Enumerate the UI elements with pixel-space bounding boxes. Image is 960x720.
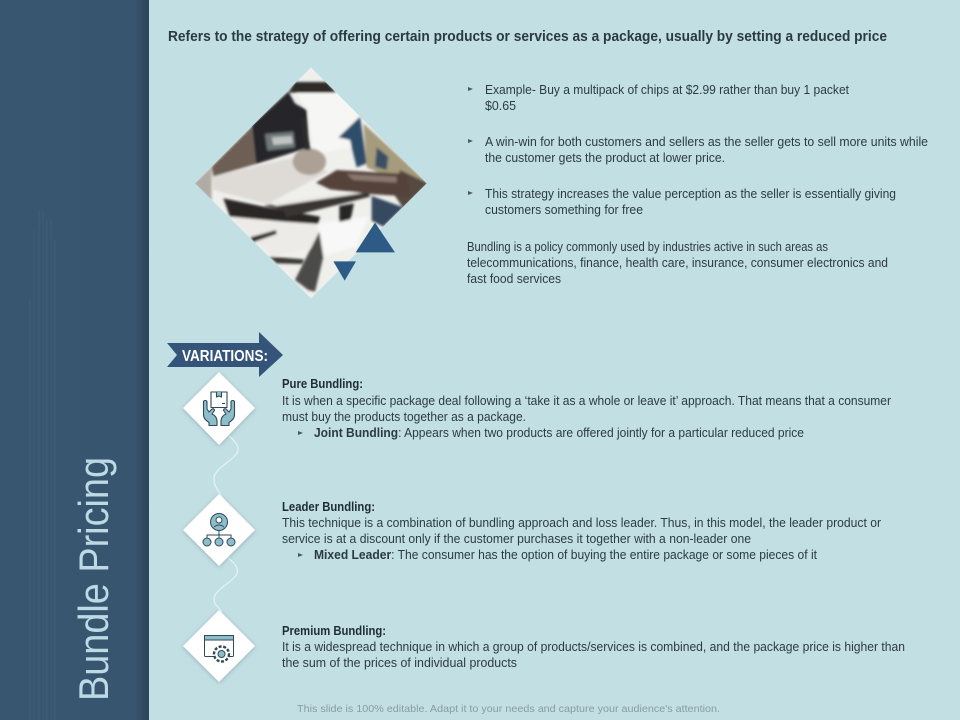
connector: wavy line 1 — [214, 436, 238, 504]
arrow banner: variations — [167, 332, 283, 377]
heading: Refers to the strategy of offering certain products or services as a package, usually by setting a reduced price — [168, 28, 887, 45]
text block: premium bundling: the sum of the prices of individual products — [282, 655, 517, 670]
icon: small triangle — [333, 261, 356, 281]
sidebar title: Bundle Pricing — [70, 457, 117, 701]
panel: sidebar — [0, 0, 149, 720]
text block: premium bundling: It is a widespread technique in which a group of products/services is combined, and the package price is higher than — [282, 639, 905, 654]
text block: leader bundling: service is at a discount only if the customer purchases it together with a non-leader one — [282, 531, 751, 546]
paragraph: industries: fast food services — [467, 271, 561, 286]
text block: pure bundling: must buy the products together as a package. — [282, 409, 526, 424]
paragraph: industries: Bundling is a policy commonly used by industries active in such areas as — [467, 239, 828, 254]
bullet 3: This strategy increases the value perception as the seller is essentially giving — [485, 186, 896, 201]
paragraph: industries — [467, 239, 888, 286]
icon: large triangle — [356, 223, 395, 252]
text block: premium bundling — [282, 624, 905, 670]
icon: leader hierarchy — [183, 494, 255, 566]
text block: leader bundling — [282, 500, 882, 562]
text block: leader bundling: Mixed Leader: The consumer has the option of buying the entire package or some pieces of it — [314, 547, 817, 562]
text block: pure bundling — [282, 377, 892, 440]
bullet 2 — [485, 134, 928, 165]
bullet 1: Example- Buy a multipack of chips at $2.99 rather than buy 1 packet — [485, 82, 849, 97]
text block: pure bundling: Joint Bundling: Appears when two products are offered jointly for a particular reduced price — [314, 425, 804, 440]
footer note: This slide is 100% editable. Adapt it to your needs and capture your audience's attention. — [297, 703, 720, 715]
arrow banner: variations: VARIATIONS: — [182, 348, 268, 365]
text block: leader bundling: Leader Bundling: — [282, 500, 375, 514]
bullet 1 — [485, 82, 849, 113]
text block: premium bundling: Premium Bundling: — [282, 624, 386, 638]
bullet 1: $0.65 — [485, 98, 516, 113]
text block: pure bundling: It is when a specific package deal following a ‘take it as a whole or leave it’ approach. That means that a consumer — [282, 393, 892, 408]
icon: hands holding box — [183, 372, 255, 445]
paragraph: industries: telecommunications, finance, health care, insurance, consumer electronics and — [467, 255, 888, 270]
bullet 2: the customer gets the product at lower price. — [485, 150, 725, 165]
bullet 2: A win-win for both customers and sellers as the seller gets to sell more units while — [485, 134, 928, 149]
bullet list — [468, 82, 928, 217]
text block: leader bundling: This technique is a combination of bundling approach and loss leader. Thus, in this model, the leader product or — [282, 515, 882, 530]
icon: browser with gear badge — [183, 610, 255, 682]
text block: pure bundling: Pure Bundling: — [282, 377, 363, 391]
bullet 3 — [485, 186, 896, 217]
bullet 3: customers something for free — [485, 202, 643, 217]
connector: wavy line 2 — [214, 558, 238, 612]
photo diamond with triangles — [193, 67, 430, 300]
